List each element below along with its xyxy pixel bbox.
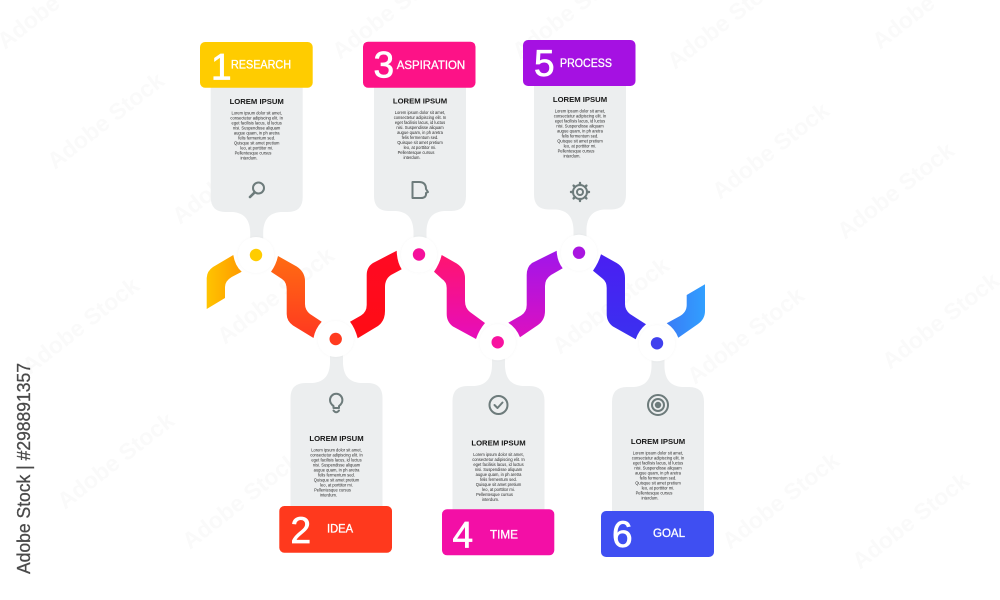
heading: LOREM IPSUM xyxy=(230,97,284,106)
body text: augue quam, in ph aretra xyxy=(635,470,682,476)
timeline node 2 xyxy=(318,321,354,357)
heading: LOREM IPSUM xyxy=(553,95,607,104)
body text: consectetur adipiscing elit. In xyxy=(230,115,284,120)
body text: Lorem ipsum dolor sit amet, xyxy=(473,452,524,457)
watermark: Adobe Stock xyxy=(52,407,179,514)
body text: eget facilisis lacus, id luctus xyxy=(555,118,605,124)
body text: consectetur adipiscing elit. In xyxy=(310,453,363,458)
body text: Quisque sit amet pretium xyxy=(557,138,603,144)
body text: nisi. Suspendisse aliquam xyxy=(233,125,281,130)
body text: Pellentesque cursus xyxy=(235,150,271,155)
panel: step 1 research xyxy=(200,42,313,254)
body text: leo, at porttitor mi. xyxy=(482,487,515,492)
body text: consectetur adipiscing elit. In xyxy=(632,456,685,460)
header bar xyxy=(601,511,714,557)
body text: interdum. xyxy=(240,155,258,160)
panel: step 6 goal xyxy=(601,345,714,557)
step number: 3 xyxy=(374,44,394,86)
step number: 2 xyxy=(290,510,311,551)
watermark: Adobe Stock xyxy=(832,137,959,244)
header bar xyxy=(523,40,636,86)
heading: LOREM IPSUM xyxy=(393,96,447,105)
body text: interdum. xyxy=(403,155,421,160)
wavy ribbon xyxy=(207,251,705,339)
card body xyxy=(534,84,626,252)
card body xyxy=(452,344,544,511)
watermark: Adobe Stock xyxy=(707,97,834,204)
header label: PROCESS xyxy=(560,58,612,70)
body text: Pellentesque cursus xyxy=(636,490,672,496)
body text: nisi. Suspendisse aliquam xyxy=(475,467,523,472)
panel: step 5 process xyxy=(523,40,636,252)
body text: Quisque sit amet pretium xyxy=(635,480,681,486)
watermark: Adobe Stock xyxy=(717,447,844,554)
heading: LOREM IPSUM xyxy=(631,437,685,446)
header label: RESEARCH xyxy=(231,59,291,71)
body text xyxy=(394,110,447,160)
body text: eget facilisis lacus, id luctus xyxy=(232,120,282,125)
watermark: Adobe Stock xyxy=(177,447,304,554)
timeline node 3 xyxy=(401,236,437,272)
body text: Pellentesque cursus xyxy=(476,492,513,497)
panel: step 4 time xyxy=(442,344,554,556)
side credit text: Adobe Stock | #298891357 xyxy=(14,363,34,574)
timeline node 5 xyxy=(561,235,597,271)
header bar xyxy=(442,509,554,555)
watermark: Adobe Stock xyxy=(17,272,144,379)
body text: consectetur adipiscing elit. In xyxy=(472,457,525,462)
header bar xyxy=(279,506,392,553)
body text: Lorem ipsum dolor sit amet, xyxy=(395,110,445,115)
body text: Lorem ipsum dolor sit amet, xyxy=(555,108,605,114)
body text: felis fermentum sed. xyxy=(562,134,598,138)
body text: interdum. xyxy=(482,497,499,502)
watermark: Adobe Stock xyxy=(167,122,294,229)
body text: augue quam, in ph aretra xyxy=(476,472,522,477)
body text: felis fermentum sed. xyxy=(480,477,517,482)
body text: felis fermentum sed. xyxy=(402,135,438,140)
body text: felis fermentum sed. xyxy=(318,473,355,478)
icon: target xyxy=(648,395,668,415)
body text: interdum. xyxy=(320,493,337,498)
step number: 6 xyxy=(612,514,633,555)
watermark: Adobe Stock xyxy=(42,67,169,174)
ribbon segment 7 xyxy=(667,284,705,338)
icon: head profile xyxy=(412,182,428,198)
body text xyxy=(230,110,284,160)
body text: nisi. Suspendisse aliquam xyxy=(634,466,682,470)
body text: augue quam, in ph aretra xyxy=(314,468,360,473)
card body xyxy=(374,86,466,253)
body text: Pellentesque cursus xyxy=(314,488,351,493)
icon: light bulb xyxy=(330,394,342,412)
body text: eget facilisis lacus, id luctus xyxy=(311,458,362,463)
body text xyxy=(632,450,685,500)
ribbon segment 5 xyxy=(508,251,563,337)
body text: eget facilisis lacus, id luctus xyxy=(473,462,524,467)
body text: Lorem ipsum dolor sit amet, xyxy=(231,110,282,115)
icon: gear xyxy=(571,183,589,201)
card body xyxy=(211,87,303,254)
header label: TIME xyxy=(490,529,518,541)
header bar xyxy=(200,42,313,88)
body text: leo, at porttitor mi. xyxy=(404,145,436,150)
body text: consectetur adipiscing elit. In xyxy=(554,114,607,118)
ribbon segment 3 xyxy=(350,251,402,338)
card body xyxy=(290,341,382,508)
body text: Quisque sit amet pretium xyxy=(314,478,360,483)
body text: felis fermentum sed. xyxy=(640,476,676,480)
panel: step 3 aspiration xyxy=(363,42,476,253)
body text: leo, at porttitor mi. xyxy=(642,486,674,490)
body text: consectetur adipiscing elit. In xyxy=(394,115,447,120)
body text: eget facilisis lacus, id luctus xyxy=(633,460,683,466)
body text xyxy=(310,448,363,498)
body text: felis fermentum sed. xyxy=(238,135,275,140)
icon: check clock xyxy=(490,396,508,414)
timeline node 6 xyxy=(639,325,675,361)
body text: Lorem ipsum dolor sit amet, xyxy=(633,450,683,456)
body text: leo, at porttitor mi. xyxy=(320,483,353,488)
body text: leo, at porttitor mi. xyxy=(564,144,596,148)
body text: interdum. xyxy=(563,154,581,158)
ribbon segment 2 xyxy=(271,256,322,338)
body text: Lorem ipsum dolor sit amet, xyxy=(311,448,362,453)
icon: magnifier xyxy=(250,182,264,197)
body text: eget facilisis lacus, id luctus xyxy=(395,120,445,125)
body text: nisi. Suspendisse aliquam xyxy=(556,124,604,128)
body text: interdum. xyxy=(641,496,659,500)
watermark: Adobe Stock xyxy=(682,282,809,389)
card body xyxy=(612,345,704,512)
header label: ASPIRATION xyxy=(397,60,465,72)
header label: GOAL xyxy=(653,528,686,540)
body text: nisi. Suspendisse aliquam xyxy=(313,463,361,468)
body text: Pellentesque cursus xyxy=(398,150,434,155)
body text: augue quam, in ph aretra xyxy=(397,130,444,135)
watermark: Adobe Stock xyxy=(847,467,974,574)
step number: 1 xyxy=(211,46,232,87)
timeline node 1 xyxy=(238,237,274,273)
step number: 5 xyxy=(534,43,555,84)
panel: step 2 idea xyxy=(279,341,392,553)
body text: augue quam, in ph aretra xyxy=(234,130,280,135)
watermark: Adobe Stock xyxy=(212,242,339,349)
body text xyxy=(472,452,525,502)
heading: LOREM IPSUM xyxy=(309,434,364,443)
body text: Pellentesque cursus xyxy=(558,148,594,154)
watermark: Adobe Stock xyxy=(547,252,674,359)
body text xyxy=(554,108,607,158)
body text: Quisque sit amet pretium xyxy=(476,482,522,487)
heading: LOREM IPSUM xyxy=(471,439,526,448)
body text: leo, at porttitor mi. xyxy=(240,145,273,150)
body text: Quisque sit amet pretium xyxy=(234,140,280,145)
step number: 4 xyxy=(452,515,473,556)
ribbon segment 4 xyxy=(434,255,485,339)
header label: IDEA xyxy=(327,524,353,536)
body text: nisi. Suspendisse aliquam xyxy=(396,125,444,130)
header bar xyxy=(363,42,476,88)
body text: Quisque sit amet pretium xyxy=(397,140,443,145)
ribbon segment 6 xyxy=(593,254,646,339)
ribbon segment 1 xyxy=(207,255,242,309)
body text: augue quam, in ph aretra xyxy=(557,128,604,134)
timeline node 4 xyxy=(480,324,516,360)
